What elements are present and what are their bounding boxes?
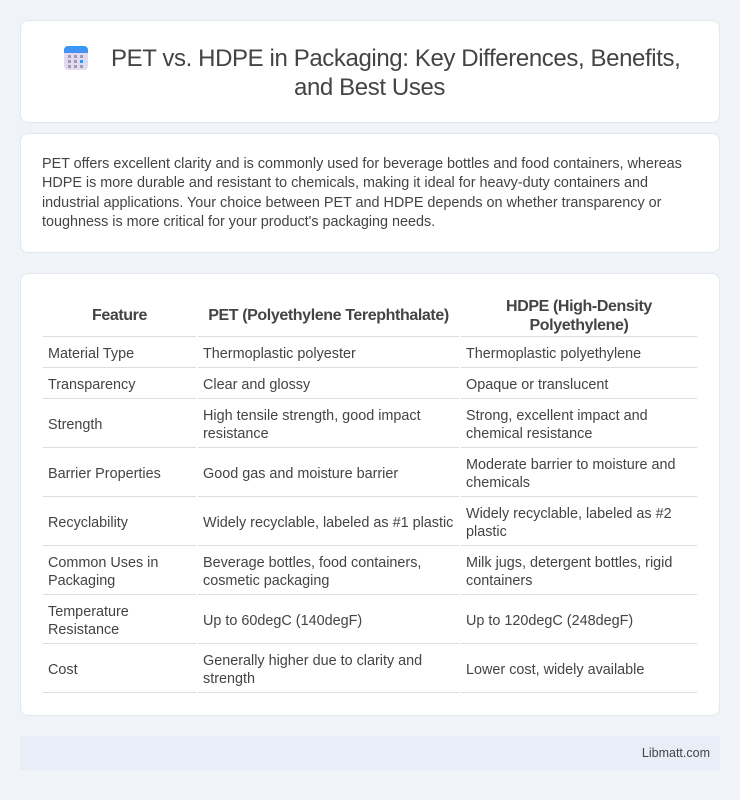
row: temperature resistance: Resistance xyxy=(48,622,119,638)
row: strength: Strength xyxy=(48,417,102,433)
row: recyclability xyxy=(48,506,672,540)
row: cost xyxy=(48,653,644,687)
row: temperature resistance: Up to 120degC (248degF) xyxy=(466,613,633,629)
row: barrier properties: Good gas and moisture barrier xyxy=(203,466,398,482)
icon: calendar xyxy=(64,46,88,70)
comparison table panel xyxy=(20,273,720,716)
row: material type xyxy=(48,346,641,362)
row: material type: Thermoplastic polyethylene xyxy=(466,346,641,362)
footer credit: Libmatt.com xyxy=(642,746,710,760)
header row: PET (Polyethylene Terephthalate) xyxy=(208,307,449,324)
row: common uses: Packaging xyxy=(48,573,115,589)
header row: Polyethylene) xyxy=(530,317,628,334)
row: common uses: Common Uses in xyxy=(48,555,158,571)
row: barrier properties: Moderate barrier to moisture and xyxy=(466,457,676,473)
row: strength: Strong, excellent impact and xyxy=(466,408,648,424)
header row xyxy=(92,298,652,334)
row: temperature resistance xyxy=(48,604,633,638)
row: barrier properties xyxy=(48,457,676,491)
title: PET vs. HDPE in Packaging: Key Differences, Benefits, xyxy=(111,45,680,72)
row: common uses xyxy=(48,555,672,589)
row: transparency: Clear and glossy xyxy=(203,377,310,393)
row: strength: chemical resistance xyxy=(466,426,592,442)
row: transparency: Transparency xyxy=(48,377,135,393)
intro paragraph: HDPE is more durable and resistant to chemicals, making it ideal for heavy-duty containers and xyxy=(42,175,648,191)
row: cost: strength xyxy=(203,671,255,687)
row: material type: Material Type xyxy=(48,346,134,362)
row: cost: Cost xyxy=(48,662,78,678)
title panel xyxy=(20,20,720,123)
row: recyclability: plastic xyxy=(466,524,507,540)
title xyxy=(111,45,680,101)
header row: Feature xyxy=(92,307,147,324)
intro paragraph: toughness is more critical for your product's packaging needs. xyxy=(42,214,435,230)
row: common uses: Beverage bottles, food containers, xyxy=(203,555,421,571)
header row: HDPE (High-Density xyxy=(506,298,652,315)
row: recyclability: Widely recyclable, labeled as #1 plastic xyxy=(203,515,453,531)
row: barrier properties: Barrier Properties xyxy=(48,466,161,482)
row: strength xyxy=(48,408,648,442)
row: strength: High tensile strength, good impact xyxy=(203,408,421,424)
intro paragraph: industrial applications. Your choice between PET and HDPE depends on whether transparency or xyxy=(42,195,661,211)
intro text panel xyxy=(20,133,720,253)
row: common uses: containers xyxy=(466,573,532,589)
row: recyclability: Widely recyclable, labeled as #2 xyxy=(466,506,672,522)
row: transparency xyxy=(48,377,608,393)
intro paragraph: PET offers excellent clarity and is commonly used for beverage bottles and food containers, whereas xyxy=(42,156,682,172)
row: recyclability: Recyclability xyxy=(48,515,128,531)
footer bar xyxy=(20,736,720,770)
row: temperature resistance: Temperature xyxy=(48,604,129,620)
row: strength: resistance xyxy=(203,426,269,442)
intro paragraph xyxy=(42,156,682,230)
row: cost: Generally higher due to clarity and xyxy=(203,653,422,669)
title: and Best Uses xyxy=(294,74,445,101)
row: material type: Thermoplastic polyester xyxy=(203,346,356,362)
row: common uses: cosmetic packaging xyxy=(203,573,329,589)
row: barrier properties: chemicals xyxy=(466,475,530,491)
row: transparency: Opaque or translucent xyxy=(466,377,608,393)
row: cost: Lower cost, widely available xyxy=(466,662,644,678)
row: common uses: Milk jugs, detergent bottles, rigid xyxy=(466,555,672,571)
row: temperature resistance: Up to 60degC (140degF) xyxy=(203,613,362,629)
